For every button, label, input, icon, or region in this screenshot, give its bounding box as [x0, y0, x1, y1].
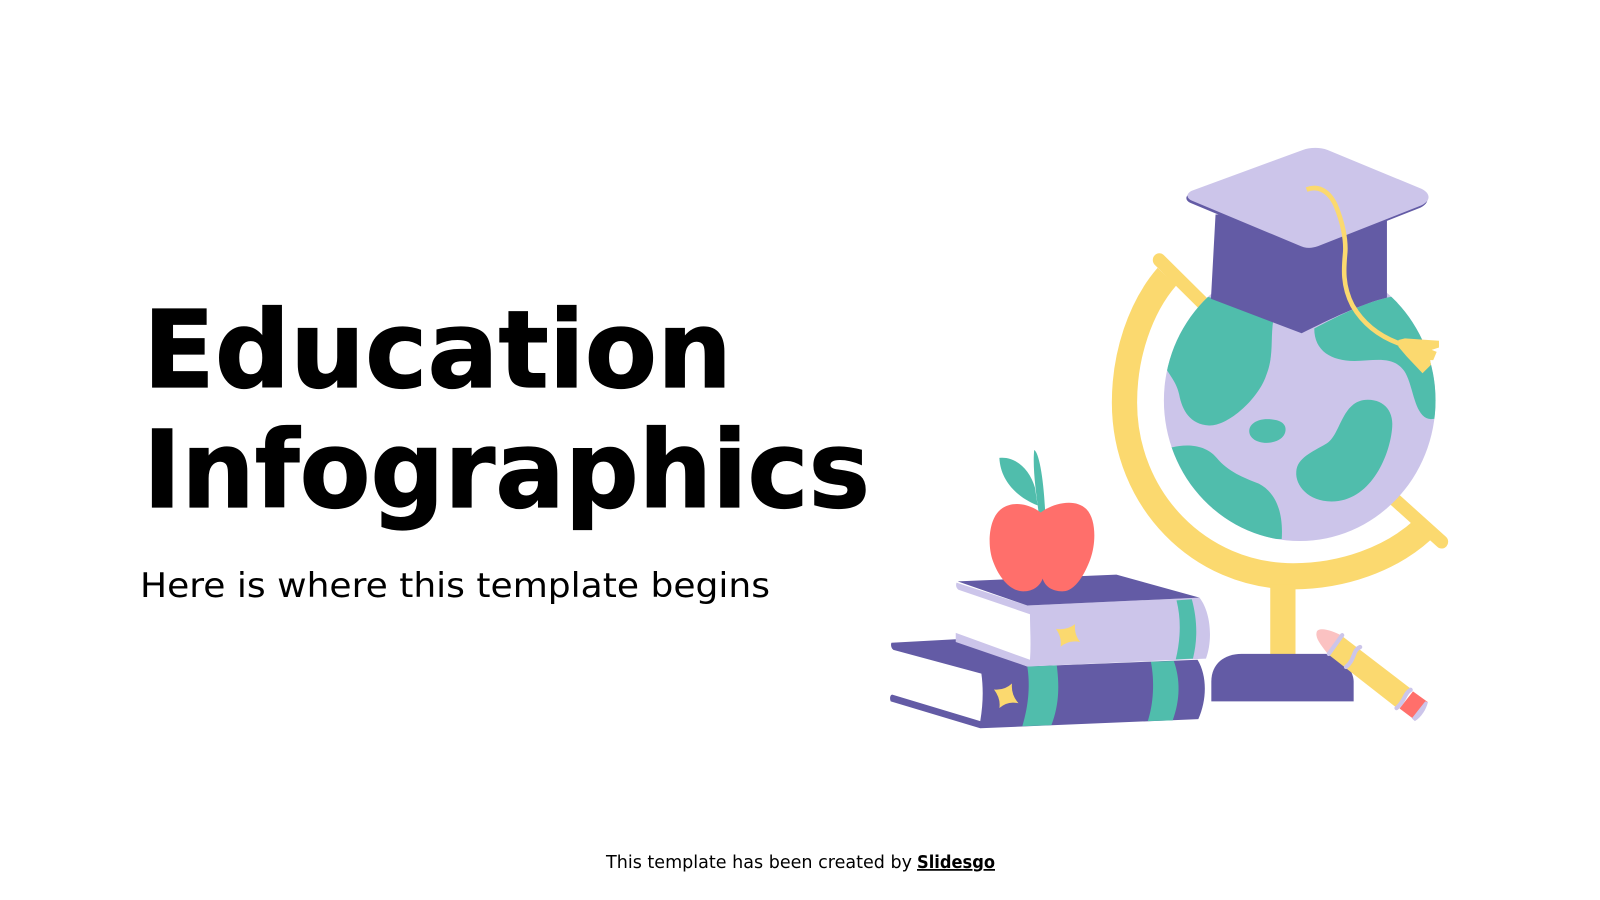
icon: globe stand	[1124, 260, 1442, 701]
footer credit: Slidesgo	[917, 853, 995, 873]
title: Education	[143, 289, 732, 413]
title: Infographics	[143, 409, 870, 533]
title	[143, 289, 870, 533]
icon: lower book	[890, 639, 1205, 728]
icon: upper book	[956, 575, 1210, 667]
illustration: globe, cap, apple, books, pencil	[890, 148, 1442, 728]
footer credit: This template has been created by	[605, 853, 912, 873]
icon: apple	[990, 450, 1094, 591]
icon: pencil	[1316, 629, 1428, 721]
icon: graduation cap	[1186, 148, 1439, 373]
icon: globe	[1164, 293, 1436, 541]
subtitle: Here is where this template begins	[140, 566, 770, 606]
